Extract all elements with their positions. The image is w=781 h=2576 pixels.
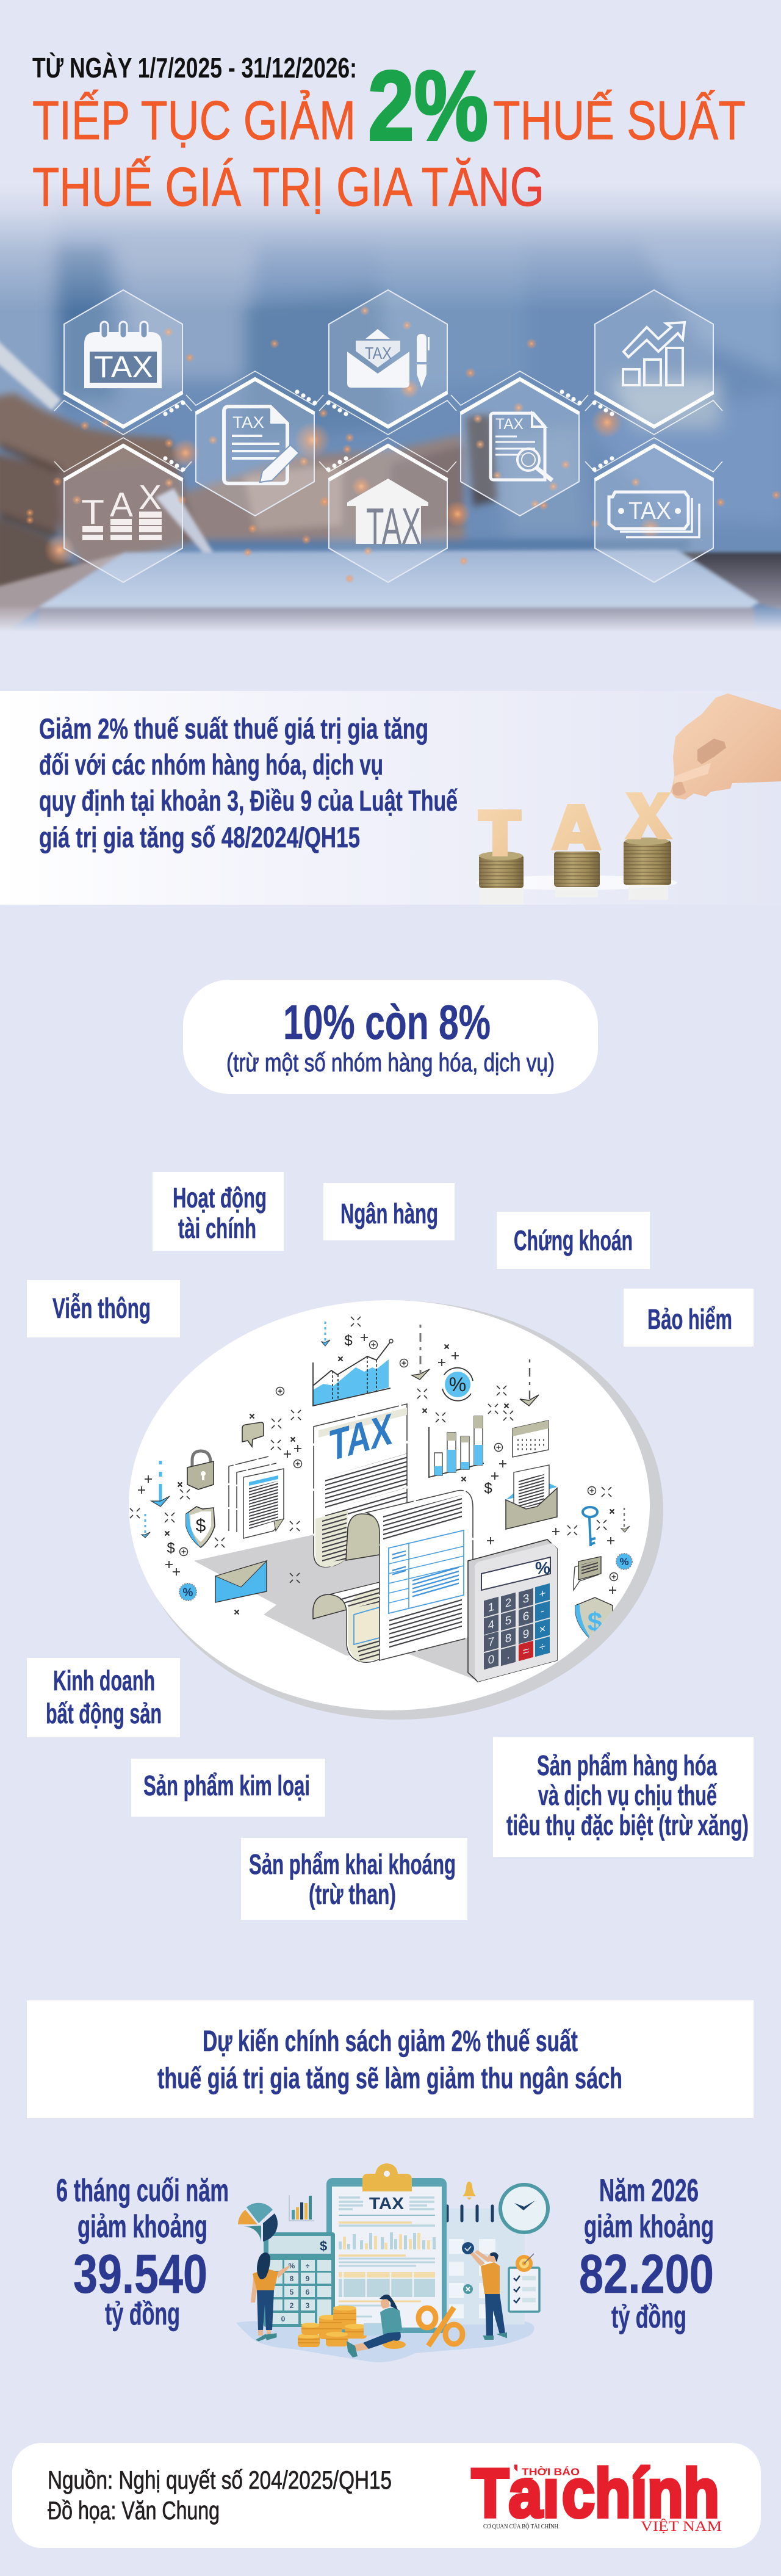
icon hexagon: TAX on coin stacks: X (139, 478, 162, 517)
calculator: 6 (523, 1610, 529, 1624)
panel: footer source and logo (12, 2443, 761, 2548)
calculator: 2 (290, 2301, 294, 2310)
label: Sản phẩm kim loại: Sản phẩm kim loại (143, 1770, 310, 1801)
label: Ngân hàng (323, 1183, 455, 1240)
label: Bảo hiểm: Bảo hiểm (647, 1303, 732, 1335)
label: Kinh doanh bất động sản (27, 1658, 180, 1737)
icon hexagon: tax envelope and pen (319, 290, 456, 435)
calendar board (447, 2206, 525, 2325)
intro text block: đối với các nhóm hàng hóa, dịch vụ (39, 748, 383, 781)
label: Sản phẩm hàng hóa và dịch vụ chịu thuế (493, 1737, 754, 1857)
icon hexagon: TAX on coin stacks: A (110, 485, 133, 524)
calculator: % (289, 2262, 295, 2270)
stat: last six months of the year (56, 2173, 229, 2332)
decorative dollar signs: $ (167, 1540, 175, 1557)
report bars (339, 2232, 436, 2249)
icon: shield right: $ (588, 1607, 602, 1637)
icon: calendar (513, 1420, 549, 1457)
calculator: 5 (290, 2288, 294, 2296)
stat: year 2026: 82.200 (579, 2244, 714, 2305)
target checklist (509, 2254, 539, 2312)
calculator: 5 (505, 1614, 511, 1628)
woman at calculator (251, 2252, 290, 2340)
clipboard with tax report (326, 2163, 447, 2333)
icon hexagon: tax document and pencil (186, 371, 323, 516)
icon: speech bubbles (574, 1557, 601, 1590)
icon hexagon: tax calendar: TAX (94, 350, 153, 384)
label: Bảo hiểm (624, 1289, 754, 1347)
calculator: 8 (505, 1632, 511, 1646)
icon hexagon: tax document with magnifier (451, 371, 588, 516)
main TAX paper (314, 1403, 407, 1567)
label: Hoạt động tài chính: Hoạt động (173, 1182, 267, 1214)
decorative dollar signs (167, 1333, 492, 1557)
icon hexagon: tax banknotes: TAX (628, 497, 671, 524)
callout: 10% reduced to 8% pill: 10% còn 8% (283, 995, 491, 1049)
icon: down arrows (142, 1322, 630, 1538)
icon hexagon: tax banknotes (585, 438, 722, 582)
bell (462, 2182, 476, 2200)
decorative small marks (130, 1317, 617, 1614)
label: Sản phẩm khai khoáng (241, 1838, 467, 1920)
calculator: % (535, 1558, 550, 1577)
icon: shield right (575, 1597, 613, 1641)
clipboard with tax report: TAX (369, 2194, 404, 2213)
calculator: 1 (488, 1601, 494, 1615)
intro text block (39, 712, 458, 853)
icon: percent badges (179, 1368, 632, 1601)
logo: Thời báo Tài chính Việt Nam: Tài (472, 2455, 560, 2531)
icon hexagon: rising chart (585, 290, 722, 435)
label: Hoạt động tài chính (153, 1172, 284, 1251)
icon: blue key (583, 1507, 597, 1546)
calculator: 6 (306, 2288, 310, 2296)
icon hexagon: tax document with magnifier: TAX (495, 416, 524, 433)
logo: Thời báo Tài chính Việt Nam: chính (562, 2455, 719, 2531)
label: Hoạt động tài chính: tài chính (178, 1212, 256, 1244)
clock (500, 2185, 548, 2232)
label: Viễn thông (27, 1280, 180, 1337)
icon: percent badges: % (449, 1373, 466, 1395)
man placing check mark (462, 2242, 506, 2339)
stat: last six months of the year: giảm khoảng (77, 2209, 207, 2245)
icon hexagon: house with TAX: TAX (366, 497, 421, 555)
logo: Thời báo Tài chính Việt Nam: THỜI BÁO (522, 2466, 580, 2478)
calculator (264, 2232, 335, 2327)
panel: budget revenue heading: Dự kiến chính sách giảm 2% thuế suất (203, 2025, 578, 2058)
hero photo: hand writing on tablet with tax hexagons (0, 177, 781, 647)
logo: Thời báo Tài chính Việt Nam (472, 2455, 722, 2534)
label: Chứng khoán: Chứng khoán (514, 1225, 633, 1256)
icon hexagon: TAX on coin stacks (54, 438, 192, 582)
decorative dollar signs: $ (344, 1333, 353, 1349)
calculator: 4 (488, 1618, 495, 1632)
main TAX paper: TAX (329, 1403, 392, 1471)
orange percent sign (419, 2307, 462, 2346)
source credits: Đồ họa: Văn Chung (48, 2496, 220, 2525)
panel: tax document illustration on ellipse (129, 1300, 663, 1720)
intro text block: quy định tại khoản 3, Điều 9 của Luật Thuế (39, 784, 458, 817)
label: Ngân hàng: Ngân hàng (340, 1198, 438, 1229)
callout: 10% reduced to 8% pill: (trừ một số nhóm hàng hóa, dịch vụ) (226, 1048, 555, 1077)
photo top and bottom fades (0, 177, 781, 641)
label: Kinh doanh bất động sản: Kinh doanh (53, 1665, 155, 1696)
calculator: 7 (273, 2274, 278, 2283)
icon: percent badges: % (183, 1586, 193, 1599)
icon: line chart (313, 1339, 393, 1406)
calculator: + (539, 1587, 546, 1601)
floor shadow (194, 1535, 476, 1680)
long receipt sheet with form (313, 1491, 473, 1662)
illustration: tax clipboard with people (236, 2163, 548, 2362)
calculator: = (522, 1644, 530, 1659)
pie chart (238, 2203, 278, 2241)
icon: wooden TAX letters on coin stacks with hand (476, 693, 781, 905)
logo: Thời báo Tài chính Việt Nam: VIỆT NAM (641, 2519, 722, 2534)
icon hexagon: house with TAX (319, 438, 456, 582)
stat: last six months of the year: 6 tháng cuối năm (56, 2173, 229, 2209)
calculator: 0 (488, 1653, 494, 1667)
label: Viễn thông: Viễn thông (52, 1292, 151, 1324)
label: Sản phẩm khai khoáng: Sản phẩm khai khoáng (249, 1848, 456, 1880)
stat: year 2026 (579, 2173, 714, 2335)
intro text block: giá trị gia tăng số 48/2024/QH15 (39, 821, 360, 853)
stat: last six months of the year: 39.540 (73, 2244, 207, 2305)
calculator: 3 (306, 2301, 310, 2310)
label: Sản phẩm khai khoáng: (trừ than) (309, 1878, 396, 1910)
icon hexagon: tax envelope and pen: TAX (365, 344, 392, 363)
calculator: × (539, 1623, 546, 1637)
logo: Thời báo Tài chính Việt Nam: CƠ QUAN CỦA BỘ TÀI CHÍNH (483, 2523, 558, 2530)
icon: dollar shield (186, 1507, 215, 1547)
callout: 10% reduced to 8% pill (183, 980, 598, 1094)
calculator: . (506, 1649, 510, 1662)
label: Kinh doanh bất động sản: bất động sản (46, 1698, 162, 1729)
source credits (48, 2466, 392, 2525)
panel: hero title (32, 51, 746, 218)
icon hexagon: tax calendar (54, 290, 192, 435)
icon: chat bubble (242, 1422, 264, 1447)
calculator: 9 (306, 2274, 310, 2283)
calculator: 9 (523, 1627, 529, 1641)
icon: blue envelope (215, 1561, 267, 1602)
decorative dollar signs: $ (484, 1480, 492, 1497)
stat: year 2026: Năm 2026 (599, 2173, 699, 2209)
calculator: 3 (523, 1592, 529, 1606)
icon: stacked documents (229, 1456, 284, 1538)
icon: open envelope with letter (506, 1465, 557, 1529)
hands (0, 393, 689, 595)
icon: dollar shield: $ (196, 1516, 206, 1536)
intro text block: Giảm 2% thuế suất thuế giá trị gia tăng (39, 712, 428, 745)
calculator: $ (320, 2238, 327, 2254)
calculator: 2 (505, 1596, 511, 1610)
icon hexagon: tax document and pencil: TAX (232, 413, 264, 432)
calculator: ÷ (539, 1640, 545, 1654)
calculator: 8 (290, 2274, 294, 2283)
title kicker: TỪ NGÀY 1/7/2025 - 31/12/2026: (32, 52, 357, 84)
calculator: 7 (488, 1635, 494, 1649)
calculator: - (541, 1604, 544, 1618)
glowing spark particles (26, 306, 781, 584)
stat: year 2026: tỷ đồng (611, 2299, 686, 2335)
calculator (468, 1539, 557, 1682)
coin stacks (298, 2306, 367, 2347)
ground blob (236, 2321, 534, 2362)
title line two: THUẾ GIÁ TRỊ GIA TĂNG (32, 156, 544, 218)
stat: year 2026: giảm khoảng (584, 2209, 714, 2245)
stat: last six months of the year: tỷ đồng (105, 2296, 180, 2332)
label: Chứng khoán (497, 1212, 650, 1269)
sitting woman with laptop (347, 2295, 406, 2357)
icon: padlock (187, 1451, 214, 1489)
source credits: Nguồn: Nghị quyết số 204/2025/QH15 (48, 2466, 392, 2494)
panel: budget revenue heading (27, 2000, 754, 2118)
icon hexagon: TAX on coin stacks: T (81, 493, 104, 532)
icon: percent badges: % (619, 1556, 629, 1568)
panel: intro banner (0, 691, 781, 905)
title highlight 2%: 2% (368, 51, 488, 161)
title line one left: TIẾP TỤC GIẢM (32, 89, 356, 151)
icon: bar chart (429, 1416, 484, 1477)
mini chart (289, 2195, 314, 2221)
label: Sản phẩm kim loại (131, 1759, 325, 1817)
calculator: ÷ (306, 2262, 310, 2270)
calculator: 0 (281, 2315, 286, 2323)
